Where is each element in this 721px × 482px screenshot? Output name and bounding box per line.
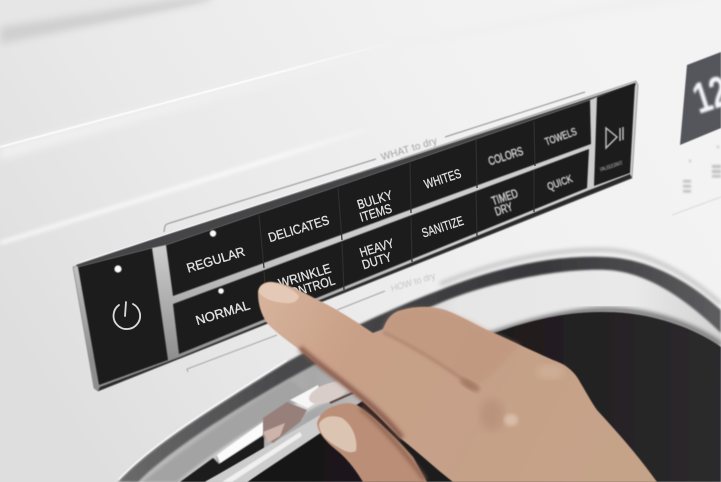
icon: power	[114, 302, 140, 329]
regular indicator light	[210, 230, 216, 237]
power button	[78, 248, 168, 385]
labels: ITEMS	[358, 201, 394, 225]
normal indicator light	[218, 288, 224, 294]
hand	[258, 282, 657, 482]
how to dry bracket and caption	[187, 270, 437, 372]
bezel upper dark edge	[76, 83, 636, 267]
control panel bezel	[73, 81, 638, 391]
door gasket dark band	[118, 257, 721, 482]
index and middle finger crease	[383, 332, 473, 387]
button dividers	[264, 170, 534, 318]
thumb shading	[360, 408, 425, 480]
labels: SANITIZE	[420, 213, 466, 240]
labels	[194, 173, 575, 328]
bezel lower dark edge	[98, 174, 632, 391]
labels: QUICK	[546, 173, 575, 193]
chrome trim reflections	[142, 378, 357, 482]
labels	[185, 126, 579, 276]
labels: HEAVY	[358, 235, 396, 260]
icon: play pause	[606, 127, 623, 148]
labels: DRY	[494, 201, 515, 219]
knuckle highlights	[504, 414, 518, 426]
labels: TIMED	[490, 188, 520, 208]
ring shadow near glass	[450, 310, 721, 350]
what to dry bracket and caption: WHAT to dry	[380, 136, 439, 163]
small panel labels	[683, 146, 721, 192]
what-to-dry button row	[166, 100, 591, 296]
labels: TOWELS	[543, 126, 579, 148]
web shadow	[458, 376, 482, 394]
labels: CONTROL	[281, 273, 337, 303]
labels: COLORS	[486, 144, 525, 168]
labels: REGULAR	[185, 244, 247, 276]
middle finger tone	[383, 308, 520, 387]
labels: WRINKLE	[277, 261, 333, 291]
knuckle shade	[480, 399, 504, 431]
button dividers	[259, 121, 535, 268]
what to dry bracket and caption	[164, 92, 585, 232]
how-to-dry button row	[173, 149, 589, 354]
caption: PAUSE/START	[599, 160, 624, 174]
power indicator light	[114, 265, 122, 273]
labels: NORMAL	[194, 297, 252, 328]
thumbnail	[319, 416, 356, 452]
index fingernail	[259, 283, 299, 303]
thumb	[317, 403, 427, 482]
door halo around gasket	[440, 250, 721, 304]
index lower shadow	[300, 348, 402, 438]
bezel top highlight	[80, 158, 400, 262]
gasket outer highlight	[118, 360, 287, 480]
labels: DUTY	[360, 249, 393, 272]
labels: WHITES	[422, 166, 463, 192]
start pause button	[594, 83, 635, 186]
display panel	[680, 52, 721, 192]
door black glass	[247, 312, 721, 482]
labels: BULKY	[355, 187, 394, 212]
door ring surface	[130, 266, 721, 482]
index finger, middle finger and back of hand	[258, 282, 657, 482]
how to dry bracket and caption: HOW to dry	[390, 270, 437, 294]
labels: DELICATES	[266, 212, 331, 245]
